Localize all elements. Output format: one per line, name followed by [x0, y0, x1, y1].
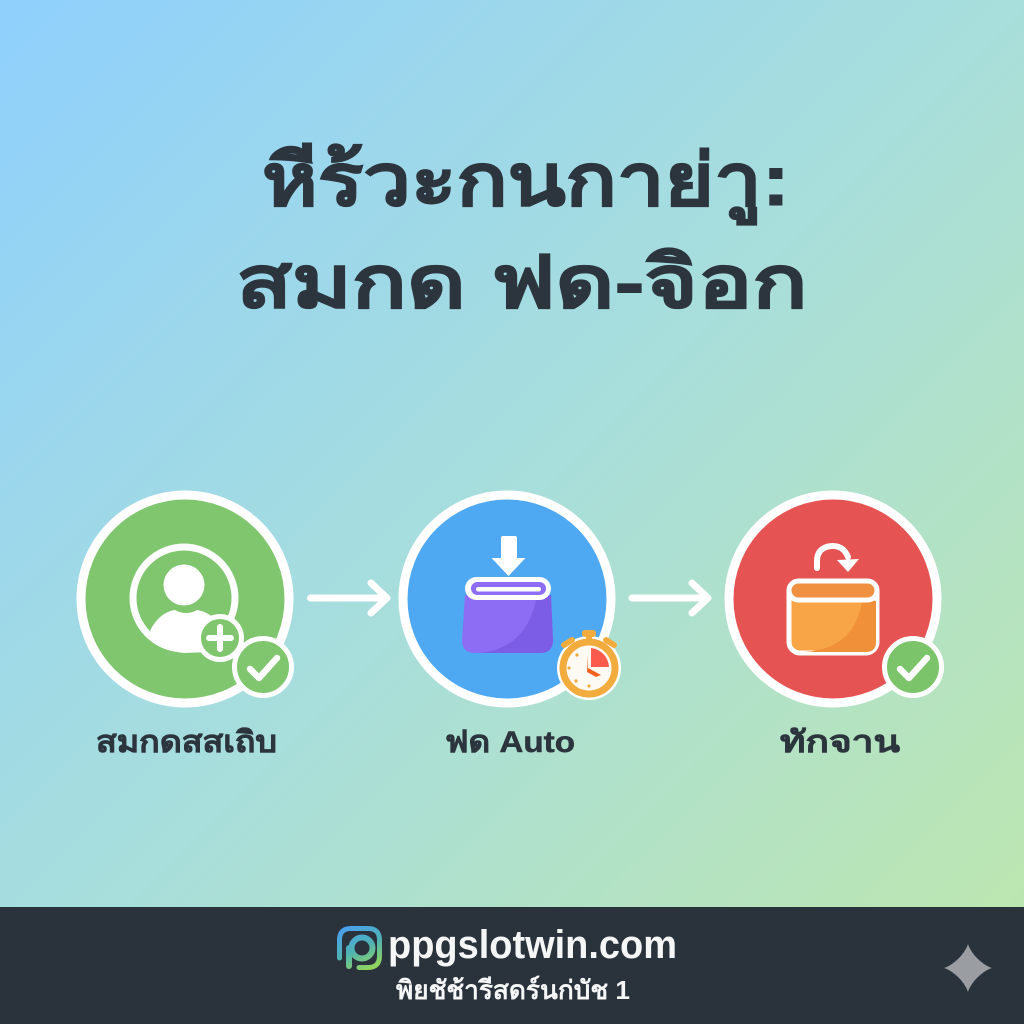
icon: orange box [789, 581, 877, 653]
title: สมกด ฟด-จิอก [236, 243, 808, 323]
icon: check badge [234, 638, 292, 696]
icon: down arrow [492, 536, 526, 576]
icon: check badge [884, 638, 942, 696]
icon: rotate arrow [817, 546, 859, 572]
step 1: sign up [81, 495, 292, 759]
icon: stopwatch [557, 630, 621, 700]
tagline: พิยชัช้ารีสดร์นก่บัช 1 [396, 975, 630, 1005]
footer bar [0, 907, 1024, 1024]
step 2 label: ฟด Auto [445, 726, 575, 759]
title [236, 141, 808, 323]
step 1 circle [81, 495, 289, 703]
icon: purple wallet [462, 577, 553, 653]
title: หีร้วะกนกาย่าู: [262, 141, 790, 226]
step 2: auto deposit [403, 495, 621, 759]
step 1 label: สมกดสสเถิบ [96, 726, 277, 759]
step 3 circle [729, 495, 937, 703]
brand name: ppgslotwin.com [388, 923, 677, 967]
step 2 circle [403, 495, 611, 703]
icon: logo [340, 928, 380, 968]
icon: plus badge [198, 616, 242, 660]
icon: user profile [133, 547, 235, 653]
arrow: step 2 to 3 [632, 583, 708, 613]
icon: sparkle [944, 944, 992, 992]
arrow: step 1 to 2 [310, 583, 387, 613]
step 3 label: ทักจาน [780, 726, 901, 759]
step 3: withdraw [729, 495, 942, 759]
